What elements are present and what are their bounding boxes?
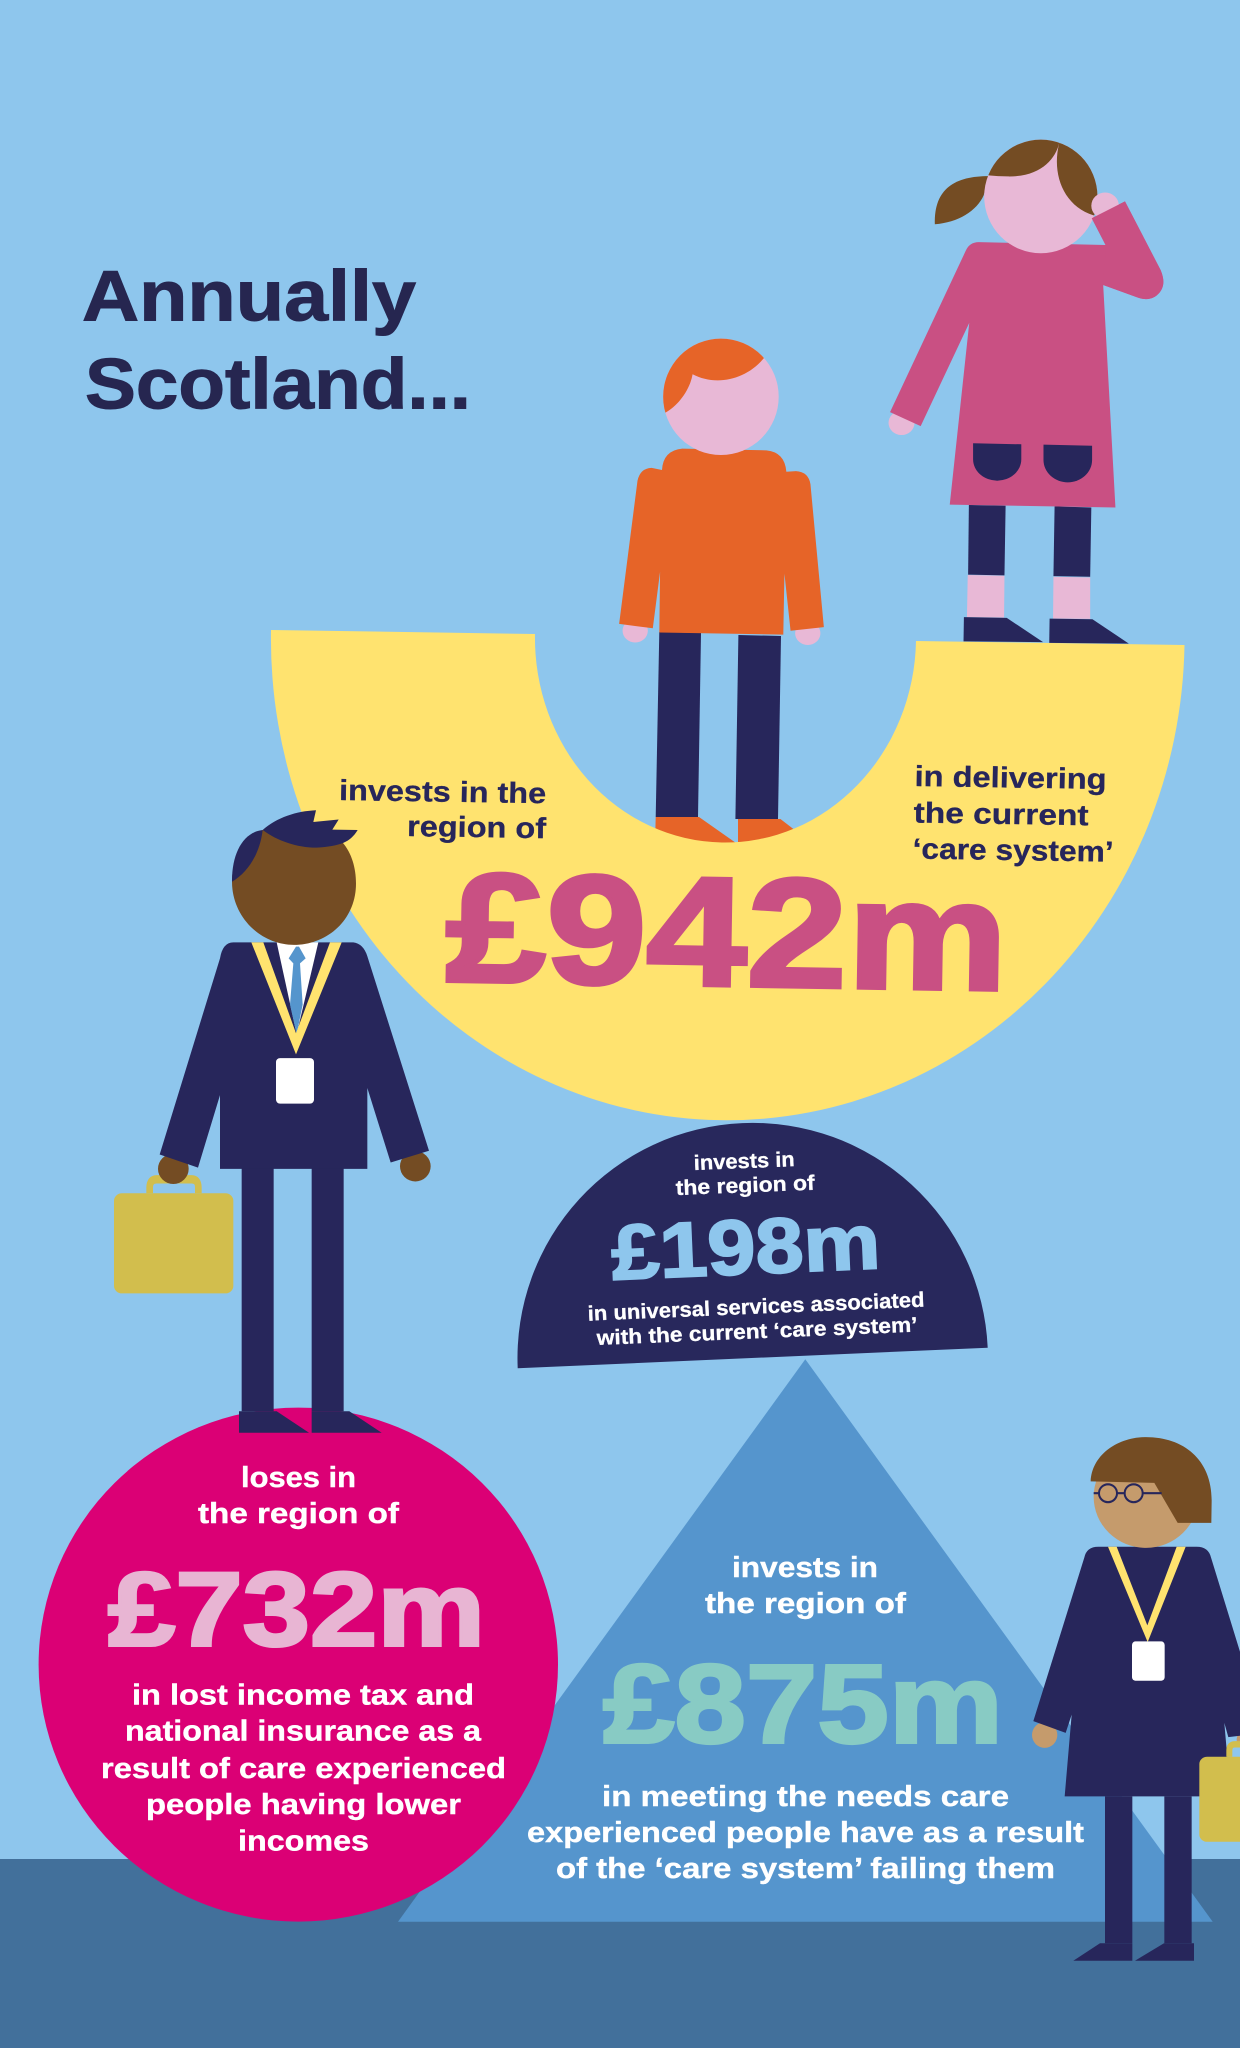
triangle intro text: the region of xyxy=(705,1588,906,1620)
semicircle description text: in universal services associated xyxy=(587,1289,925,1326)
bowl left text: invests in the xyxy=(339,775,546,810)
figure: man in suit with briefcase xyxy=(114,810,431,1433)
semicircle intro text: the region of xyxy=(675,1172,816,1200)
figure £942m: £942m xyxy=(444,841,1009,1023)
triangle description text: experienced people have as a result xyxy=(527,1817,1084,1849)
title xyxy=(82,258,471,424)
panel: dark semicircle £198m xyxy=(517,1123,988,1368)
bowl left text xyxy=(339,775,547,845)
circle intro text: loses in xyxy=(241,1462,356,1494)
circle description text: result of care experienced xyxy=(101,1753,506,1785)
magenta circle xyxy=(39,1408,558,1922)
circle description text: people having lower xyxy=(146,1789,461,1821)
circle intro text: the region of xyxy=(198,1498,399,1530)
circle description text xyxy=(101,1680,506,1858)
panel: circle £732m xyxy=(39,1408,558,1922)
figure: boy upper body xyxy=(619,327,824,645)
boy legs and shoes xyxy=(655,632,800,848)
panel: yellow bowl £942m xyxy=(271,630,1185,1120)
bowl left text: region of xyxy=(407,811,547,845)
title: Annually xyxy=(82,258,417,336)
figure: woman with glasses and lanyard xyxy=(1032,1437,1240,1961)
figure £198m: £198m xyxy=(609,1197,882,1297)
triangle intro text xyxy=(705,1552,906,1620)
panel: triangle £875m xyxy=(398,1359,1213,1922)
semicircle description text xyxy=(587,1289,925,1350)
semicircle intro text: invests in xyxy=(693,1148,795,1175)
bowl right text: ‘care system’ xyxy=(912,834,1114,869)
circle description text: in lost income tax and xyxy=(132,1680,474,1712)
bowl right text xyxy=(912,761,1114,869)
figure £732m: £732m xyxy=(108,1552,485,1668)
triangle description text: in meeting the needs care xyxy=(602,1781,1009,1813)
figure £875m: £875m xyxy=(603,1642,1003,1766)
triangle intro text: invests in xyxy=(732,1552,878,1584)
bowl right text: in delivering xyxy=(914,761,1107,796)
circle description text: incomes xyxy=(238,1826,369,1858)
circle intro text xyxy=(198,1462,399,1530)
circle description text: national insurance as a xyxy=(125,1716,482,1748)
ground band xyxy=(0,1859,1240,2048)
yellow half ring xyxy=(271,630,1185,1120)
blue triangle xyxy=(398,1359,1213,1922)
bowl right text: the current xyxy=(913,798,1089,832)
semicircle description text: with the current ‘care system’ xyxy=(595,1314,918,1350)
semicircle intro text xyxy=(675,1148,816,1200)
figure: girl in pink dress xyxy=(889,134,1163,644)
navy semicircle xyxy=(517,1123,988,1368)
triangle description text: of the ‘care system’ failing them xyxy=(556,1853,1055,1885)
triangle description text xyxy=(527,1781,1084,1885)
title: Scotland... xyxy=(85,346,471,424)
